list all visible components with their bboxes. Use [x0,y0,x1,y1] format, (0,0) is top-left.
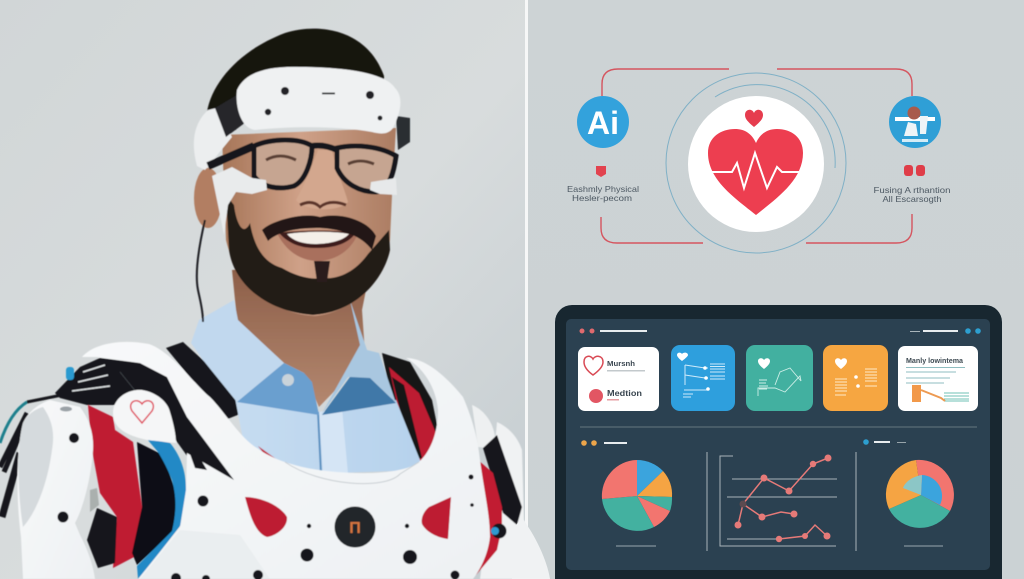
lower header left [581,440,627,446]
right internals [382,353,438,463]
neck [232,260,372,407]
red sleeve [88,405,142,568]
headset side cup [194,108,232,170]
headset strap [215,95,246,137]
right panel [512,0,1024,579]
right caption: Fusing A rthantion [874,185,951,195]
line chart [707,452,856,551]
left caption: Hesler-pecom [572,193,632,203]
figure: man wearing exoskeleton [0,29,550,579]
wire [197,220,205,322]
armor dots [171,474,474,579]
black panel [132,442,178,565]
card: white report [898,346,978,411]
icon: red shield [596,166,606,177]
chest button [334,506,376,548]
armor: heart tab [113,390,176,443]
chest button: Π [349,520,361,537]
right caption: All Escarsogth [882,194,942,204]
pie caption left [616,546,656,547]
icon: twin red badges [904,165,925,176]
icon: big heart with pulse [708,129,803,215]
blue connector [66,367,74,380]
sensor clip left [212,167,267,235]
far right arm [472,405,550,579]
silver connector [90,488,99,512]
left photo panel [0,0,550,579]
card: white report: Manly lowintema [906,356,964,365]
armor: inner ring line [285,462,419,484]
icon: red circle [589,389,603,403]
beard [226,195,390,315]
card: white metrics: Medtion [607,389,642,398]
face [222,128,396,316]
right arm overlapping the divider [512,518,550,579]
pie chart right [886,460,954,528]
headset band [237,67,400,133]
icon: heart outline [584,356,603,375]
panel divider [525,0,528,579]
left cable strands [0,393,72,517]
blue band [137,439,186,579]
shirt [235,398,424,476]
ear [194,168,222,228]
pie caption right [904,546,943,547]
lower header right [863,439,906,445]
icon: heart outline [131,401,153,423]
orbit rings [666,73,846,253]
armor: chest shading [140,530,270,579]
glasses [208,140,396,192]
dashboard header right [910,328,981,334]
central white circle [688,96,824,232]
diagram: heart health cycle [567,69,951,253]
goatee [314,261,330,282]
card: white metrics [578,347,659,411]
icon: AI badge [577,96,629,148]
icon: small heart [745,110,763,127]
armor: black chip [190,454,207,470]
card: blue [671,345,735,411]
sensor clip right [370,178,397,195]
mouth [277,230,358,261]
mustache [262,215,376,250]
tablet dashboard [555,305,1002,579]
black machinery [87,508,117,568]
red cut-out right [422,497,451,539]
left caption: Eashmly Physical [567,184,639,194]
icon: AI badge: Ai [587,105,619,141]
armor: main chest and strap [82,342,490,579]
red cut-out left [245,497,287,537]
left caption [567,184,639,203]
card: white metrics: Mursnh [607,359,635,368]
connector frame [601,69,912,243]
cable bundle behind strap [55,358,236,482]
card: teal [746,345,813,411]
collar [191,300,396,415]
strap behind collar [166,342,245,420]
nose [296,150,348,209]
hair [207,29,384,130]
icon: person badge [889,96,941,148]
pie chart left [602,460,672,531]
armor: arm piece [17,400,95,579]
card: orange [823,345,888,411]
divider [580,426,977,428]
right caption [874,185,951,204]
dashboard header left [580,328,647,334]
